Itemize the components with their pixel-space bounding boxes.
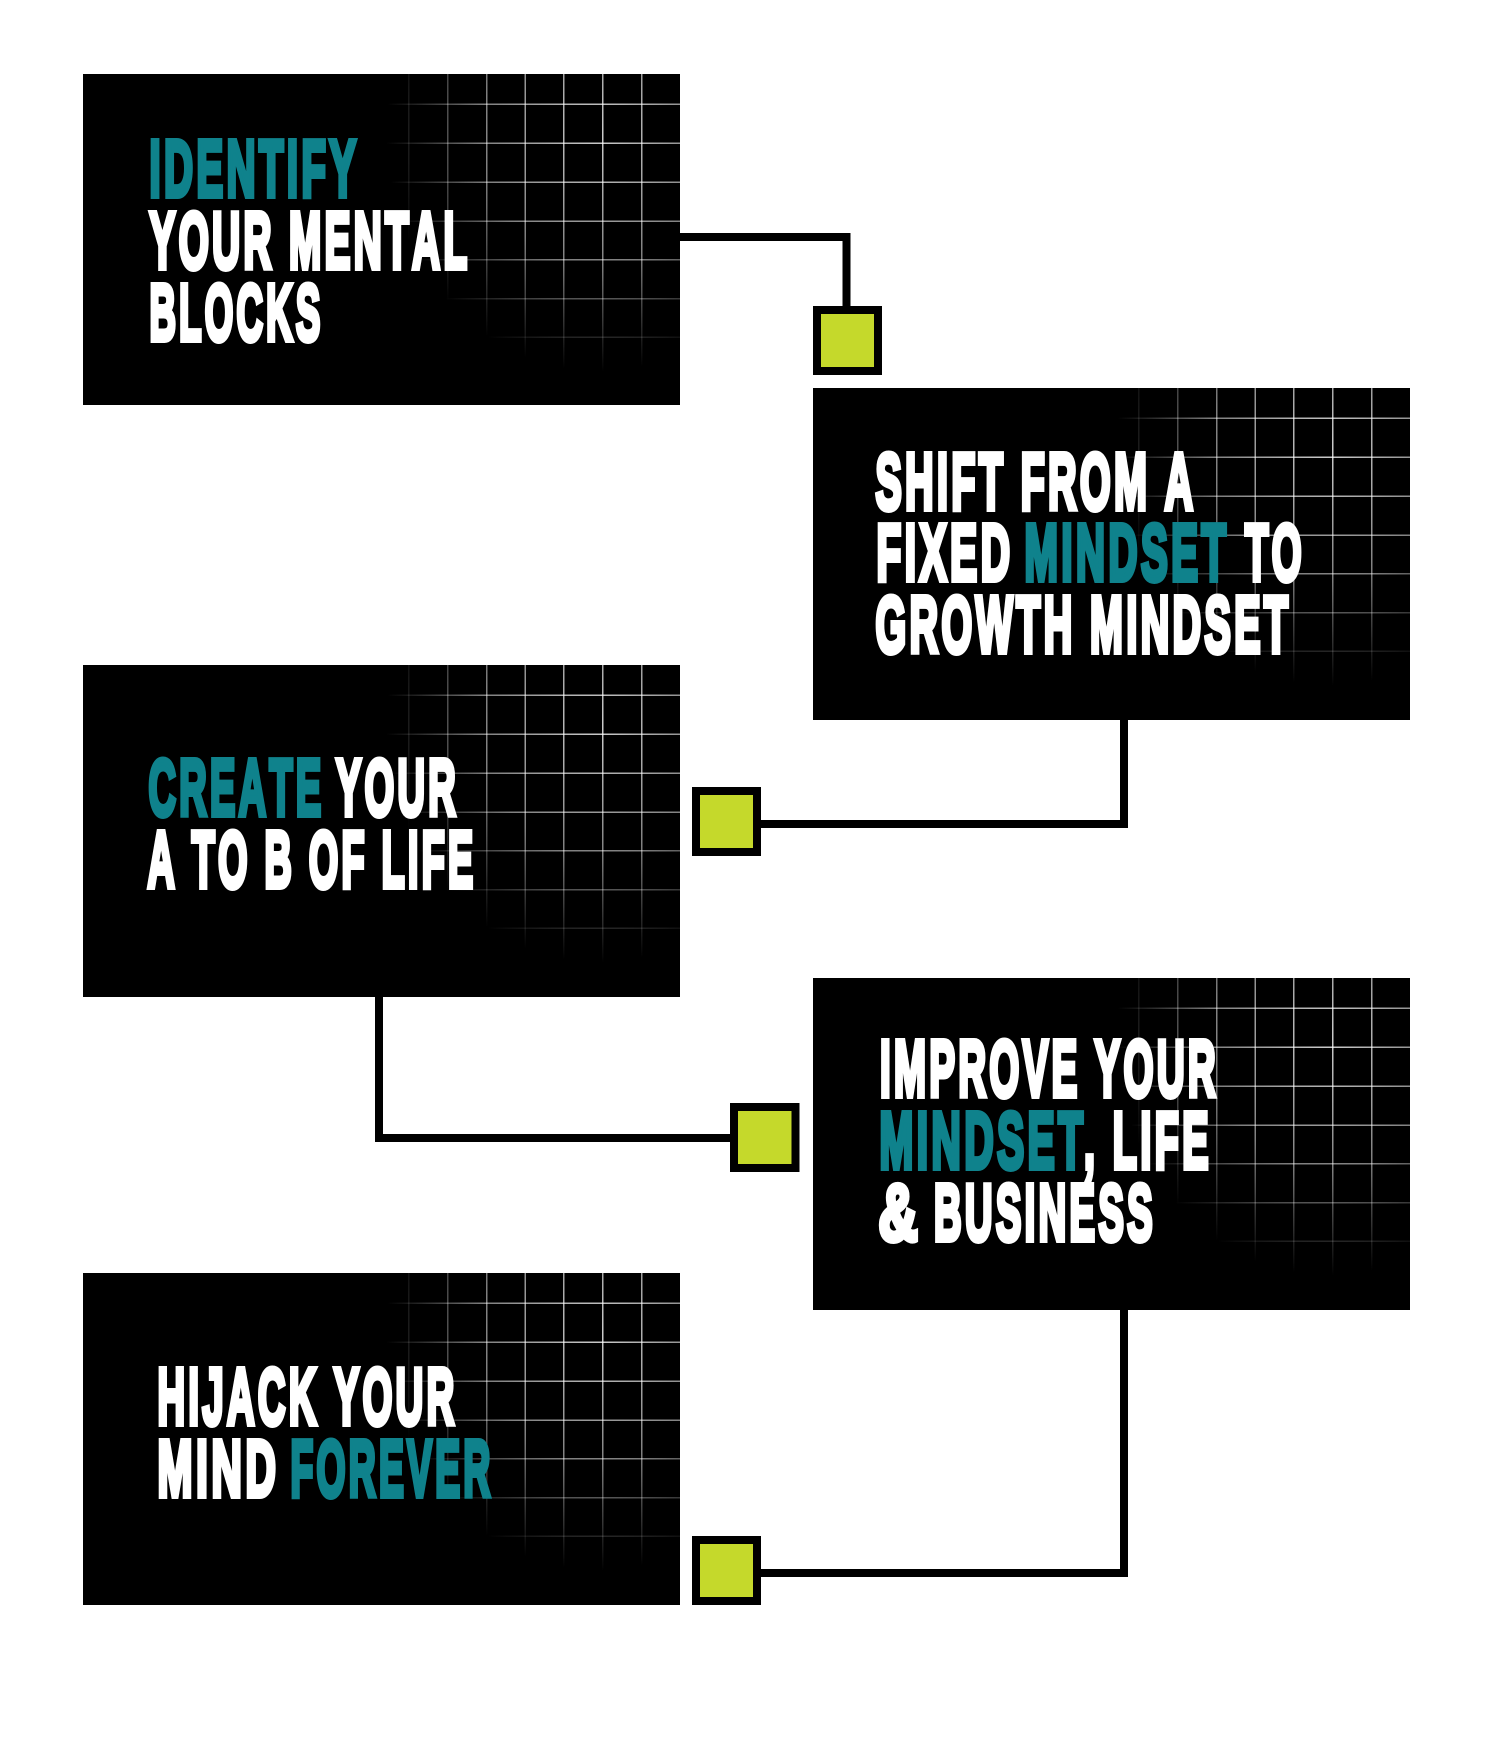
panel: improve your mindset, life and business — [813, 978, 1410, 1310]
heading: shift from a fixed mindset to growth mindset: FIXED — [876, 508, 1014, 597]
heading: improve your mindset, life & business: BUSINESS — [934, 1168, 1156, 1257]
heading: hijack your mind forever: MIND — [158, 1424, 280, 1513]
connector: panel 2 to square 2 — [761, 720, 1124, 824]
icon: lime square 3 — [730, 1103, 800, 1172]
heading: improve your mindset, life & business: , LIFE — [1084, 1096, 1212, 1185]
heading: shift from a fixed mindset to growth mindset: MINDSET — [1024, 508, 1230, 597]
connector: panel 3 to square 3 — [379, 997, 730, 1138]
panel: hijack your mind forever — [83, 1273, 680, 1605]
panel: hijack your mind forever: FOREVER — [290, 1424, 494, 1513]
heading: identify your mental blocks — [150, 124, 470, 357]
panel: identify your mental blocks — [83, 74, 680, 406]
icon: lime square 4 — [692, 1536, 761, 1605]
panel: create your a to b of life: A TO B OF LIFE — [148, 815, 476, 904]
panel: shift from a fixed mindset: TO — [1245, 508, 1305, 597]
heading: identify your mental blocks: IDENTIFY — [150, 124, 360, 213]
heading: shift from a fixed mindset to growth mindset: SHIFT FROM A — [876, 437, 1196, 526]
heading: hijack your mind forever — [158, 1352, 494, 1513]
panel: shift from a fixed mindset — [813, 388, 1410, 720]
icon: lime square 1 — [813, 306, 882, 375]
heading: shift from a fixed mindset to growth mindset — [876, 437, 1305, 669]
heading: identify your mental blocks: BLOCKS — [150, 268, 324, 357]
panel: identify your mental blocks: YOUR MENTAL — [150, 196, 470, 285]
panel: create your a to b of life — [83, 665, 680, 997]
heading: improve your mindset, life & business: & — [878, 1168, 922, 1257]
connector: panel 1 to square 1 — [680, 237, 846, 306]
heading: improve your mindset, life & business — [878, 1024, 1219, 1257]
icon: lime square 2 — [692, 787, 761, 856]
heading: create your a to b of life: CREATE — [148, 743, 324, 832]
heading: hijack your mind forever: HIJACK YOUR — [158, 1352, 458, 1441]
heading: create your a to b of life: YOUR — [336, 743, 459, 832]
heading: create your a to b of life — [148, 743, 476, 904]
connector: panel 4 to square 4 — [761, 1310, 1124, 1573]
heading: improve your mindset, life & business: MINDSET — [880, 1096, 1086, 1185]
